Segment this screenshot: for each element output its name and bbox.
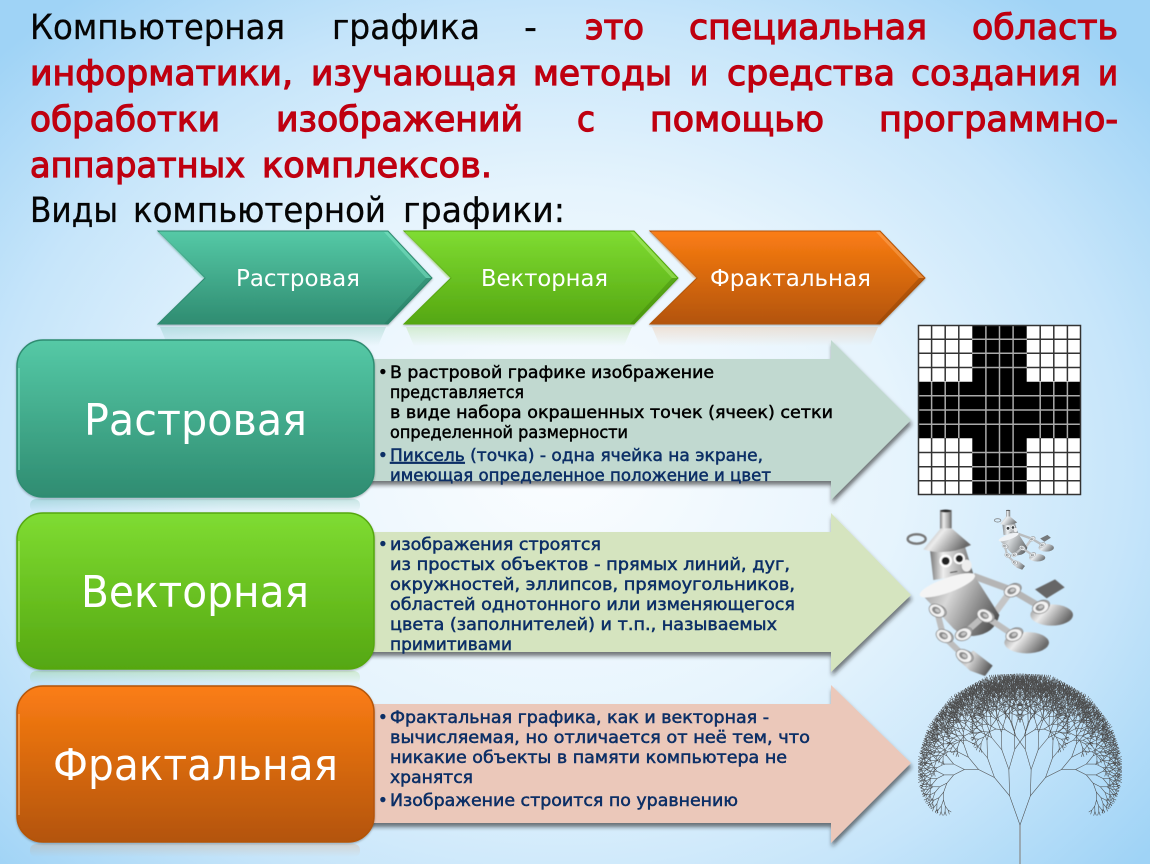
title: definition of computer graphics: специальная	[689, 8, 927, 48]
box: vector label: Векторная	[81, 567, 309, 618]
box: raster label: Растровая	[84, 395, 307, 446]
text: raster description	[378, 363, 833, 485]
illustration: pixel grid cross	[918, 325, 1081, 495]
text: raster description: Пиксель (точка) - одна ячейка на экране,	[390, 446, 763, 465]
chevron: raster: Растровая	[236, 266, 360, 292]
text: fractal description: Изображение строится по уравнению	[390, 791, 738, 810]
subtitle: types of computer graphics: Виды	[30, 191, 118, 231]
arrow: fractal description	[360, 685, 911, 843]
text: raster description: В растровой графике изображение	[390, 363, 714, 382]
title: definition of computer graphics: аппаратных	[30, 146, 245, 186]
title: definition of computer graphics: графика	[332, 8, 480, 48]
title: definition of computer graphics: и	[690, 54, 708, 94]
subtitle: types of computer graphics: компьютерной	[133, 191, 386, 231]
text: fractal description: •	[378, 708, 388, 727]
subtitle: types of computer graphics	[30, 191, 565, 231]
box: vector label	[17, 513, 374, 684]
chevron: raster	[158, 231, 432, 346]
arrow: vector description	[360, 513, 911, 672]
title: definition of computer graphics: изучающая	[311, 54, 517, 94]
panel: raster row	[17, 340, 911, 512]
panel: vector row	[17, 513, 911, 684]
title: definition of computer graphics: с	[577, 100, 595, 140]
text: vector description: областей однотонного или изменяющегося	[390, 595, 795, 614]
title: definition of computer graphics: и	[1098, 54, 1118, 94]
subtitle: types of computer graphics: графики:	[403, 191, 565, 231]
panel: fractal row	[17, 685, 911, 857]
text: fractal description: никакие объекты в памяти компьютера не	[390, 748, 787, 767]
text: vector description: окружностей, эллипсов, прямоугольников,	[390, 575, 795, 594]
text: vector description: изображения строятся	[390, 535, 601, 554]
text: raster description: в виде набора окрашенных точек (ячеек) сетки	[390, 403, 833, 422]
text: vector description	[378, 535, 795, 654]
text: fractal description: Фрактальная графика, как и векторная -	[390, 708, 769, 727]
illustration: tin man robot	[908, 510, 1073, 676]
chevron: vector: Векторная	[481, 266, 608, 292]
text: vector description: цвета (заполнителей) и т.п., называемых	[390, 615, 777, 634]
chevron: vector	[404, 231, 678, 346]
illustration: fractal tree	[900, 672, 1140, 864]
title: definition of computer graphics: программно-	[879, 100, 1118, 140]
text: raster description: имеющая определенное положение и цвет	[390, 466, 771, 485]
box: fractal label: Фрактальная	[53, 740, 338, 791]
title: definition of computer graphics: Компьютерная	[30, 8, 285, 48]
chevron: fractal	[650, 231, 925, 346]
illustration: small robot copy	[994, 510, 1054, 570]
title: definition of computer graphics: информатики,	[30, 54, 293, 94]
text: raster description: определенной размерности	[390, 423, 628, 442]
text: raster description: представляется	[390, 383, 524, 402]
title: definition of computer graphics: изображений	[276, 100, 523, 140]
title: definition of computer graphics: обработки	[30, 100, 220, 140]
text: fractal description: вычисляемая, но отличается от неё тем, что	[390, 728, 810, 747]
title: definition of computer graphics: это	[585, 8, 644, 48]
text: vector description: из простых объектов - прямых линий, дуг,	[390, 555, 790, 574]
text: raster description: •	[378, 363, 388, 382]
text: fractal description	[378, 708, 810, 810]
arrow: raster description	[360, 340, 911, 500]
title: definition of computer graphics: методы	[533, 54, 672, 94]
text: raster description: •	[378, 446, 388, 465]
box: fractal label	[17, 686, 374, 857]
text: vector description: примитивами	[390, 635, 512, 654]
title: definition of computer graphics: создания	[911, 54, 1081, 94]
title: definition of computer graphics	[30, 8, 1118, 186]
title: definition of computer graphics: -	[524, 8, 537, 48]
title: definition of computer graphics: помощью	[650, 100, 824, 140]
text: fractal description: •	[378, 791, 388, 810]
chevron: fractal: Фрактальная	[710, 266, 871, 292]
text: vector description: •	[378, 535, 388, 554]
text: fractal description: хранятся	[390, 768, 473, 787]
title: definition of computer graphics: комплексов.	[262, 146, 492, 186]
title: definition of computer graphics: средства	[727, 54, 895, 94]
title: definition of computer graphics: область	[972, 8, 1118, 48]
box: raster label	[17, 340, 374, 512]
